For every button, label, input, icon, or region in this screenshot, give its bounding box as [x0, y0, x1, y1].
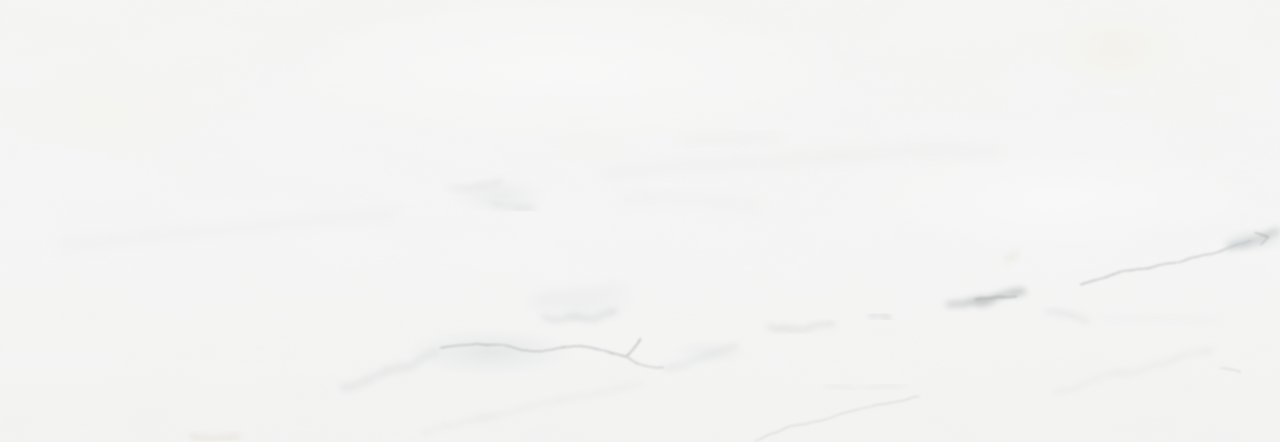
lower centre vein cluster — [340, 288, 890, 388]
main diagonal vein at right — [950, 232, 1280, 322]
faint upper-middle veins — [60, 136, 1000, 245]
bottom diagonal veins — [190, 252, 1240, 440]
central smudge vein — [450, 180, 535, 208]
